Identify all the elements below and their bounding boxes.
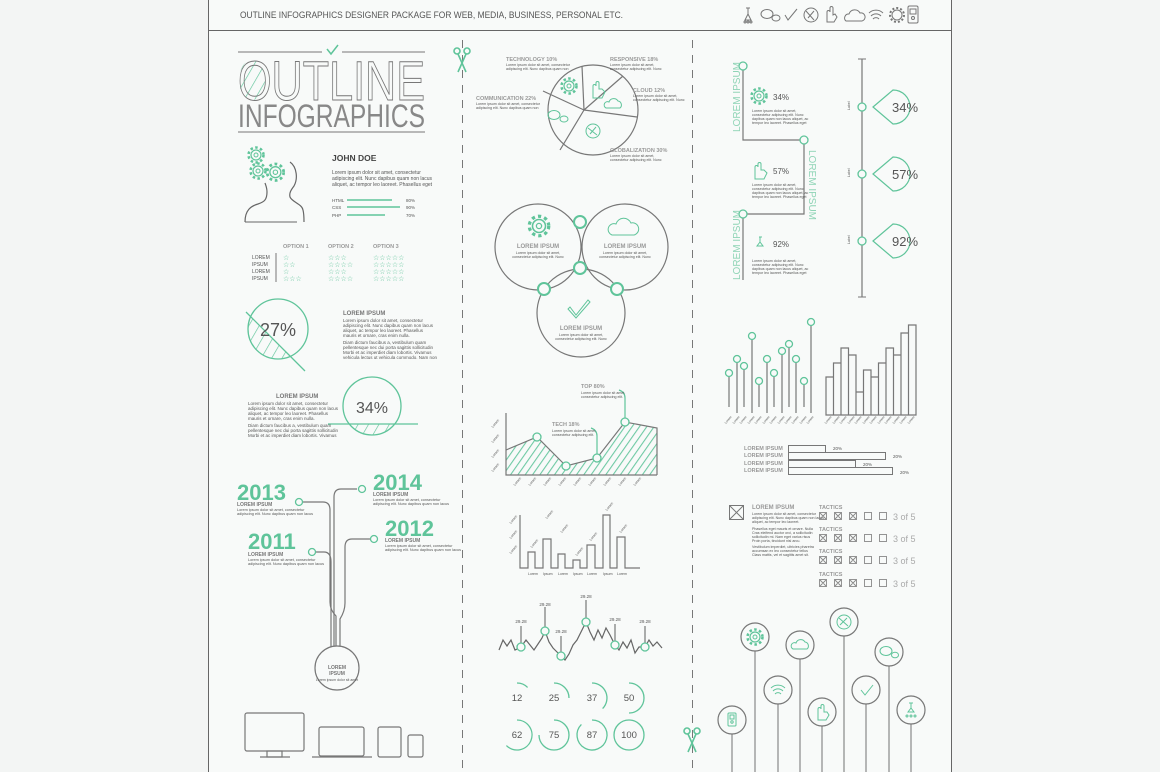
timeline tree: LOREM (328, 665, 346, 671)
venn diagram: LOREM IPSUM (517, 244, 559, 250)
lollipop chart: Lorem (806, 415, 815, 425)
text: 100 (621, 730, 637, 741)
pie chart: COMMUNICATION 22% (476, 96, 536, 102)
tactics checklist: 3 of 5 (893, 534, 916, 544)
drop scale: 34% (892, 100, 918, 115)
ratings table: ☆☆☆☆☆ (373, 261, 404, 269)
tactics checklist: TACTICS (819, 505, 843, 511)
area chart: Lorem (603, 476, 612, 487)
ratings table: IPSUM (252, 262, 268, 268)
pie chart: RESPONSIVE 18% (610, 57, 658, 63)
zigzag timeline: dapibus quam non lacus aliquet, ac (752, 191, 809, 195)
ratings table: ☆☆☆☆☆ (373, 268, 404, 276)
zigzag timeline: LOREM IPSUM (732, 62, 743, 132)
tactics checklist: Phasellus eget mauris et ornare. Nulla (752, 527, 813, 531)
area chart: consectetur adipiscing elit. (581, 395, 623, 399)
text block 2: LOREM IPSUM (276, 394, 318, 400)
profile text (332, 153, 433, 218)
profile text: 70% (406, 213, 415, 218)
column chart right: Lorem (854, 415, 863, 425)
dashed dividers (462, 40, 464, 772)
drop scale: Label (847, 168, 851, 177)
horizontal bars: 20% (833, 446, 842, 451)
bar chart: Lorem (509, 544, 518, 555)
drop scale: Label (847, 101, 851, 110)
ratings table: ☆☆☆☆ (328, 275, 353, 283)
ratings table: ☆☆☆☆☆ (373, 254, 404, 262)
text block 1: LOREM IPSUM (343, 311, 385, 317)
timeline tree: 2011 (248, 529, 296, 554)
pie chart: Lorem ipsum dolor sit amet, (610, 63, 654, 67)
ratings table: LOREM (252, 255, 270, 261)
lollipop chart: Lorem (769, 415, 778, 425)
tactics checklist: TACTICS (819, 549, 843, 555)
zigzag timeline: tempor leo laoreet. Phasellus eget (752, 121, 807, 125)
timeline tree: Lorem ipsum dolor sit amet, consectetur (385, 544, 453, 548)
venn diagram: LOREM IPSUM (604, 244, 646, 250)
area chart: Lorem (491, 433, 500, 444)
ratings table: ☆☆☆ (283, 275, 302, 283)
wave line chart: 29.28 (539, 602, 551, 607)
tactics checklist: adipiscing elit. Nunc dapibus quam non lacus (752, 516, 824, 520)
tactics checklist: Proin porta, tincidunt nisl arcu. (752, 539, 800, 543)
profile text: CSS (332, 205, 341, 210)
pie chart: adipiscing elit. Nunc dapibus quam non (506, 67, 569, 71)
wave line chart: 29.28 (639, 619, 651, 624)
column chart right: Lorem (862, 415, 871, 425)
pie chart (476, 57, 685, 162)
text block 1: Diam dictum faucibus a, vestibulum quam (343, 340, 427, 345)
column chart right: Lorem (839, 415, 848, 425)
text block 1: Lorem ipsum dolor sit amet, consectetur (343, 318, 424, 323)
text block 2: adipiscing elit. Nunc dapibus quam non lacus (248, 406, 339, 411)
area chart: Lorem (491, 418, 500, 429)
zigzag timeline: tempor leo laoreet. Phasellus eget (752, 195, 807, 199)
lollipop chart: Lorem (784, 415, 793, 425)
timeline tree: LOREM IPSUM (248, 552, 283, 558)
icon: scissors bottom (684, 728, 700, 752)
timeline tree (237, 470, 461, 690)
area chart: Lorem (528, 476, 537, 487)
timeline tree: Lorem ipsum dolor sit amet, consectetur (248, 558, 316, 562)
venn diagram: Lorem ipsum dolor sit amet, (603, 251, 647, 255)
profile text: aliquet, ac tempor leo laoreet. Phasellus eget (332, 182, 433, 188)
pie chart: TECHNOLOGY 10% (506, 57, 557, 63)
ratings table: OPTION 3 (373, 244, 399, 250)
column chart right: Lorem (877, 415, 886, 425)
area chart: Lorem ipsum dolor sit amet, (552, 429, 596, 433)
column chart right: Lorem (884, 415, 893, 425)
bar chart: Lorem (619, 523, 628, 534)
area chart: Lorem (491, 462, 500, 473)
horizontal bars (744, 446, 909, 475)
timeline tree: Lorem ipsum dolor sit amet (316, 678, 358, 682)
zigzag timeline: LOREM IPSUM (732, 210, 743, 280)
bar chart: Lorem (617, 572, 627, 576)
column chart right: Lorem (899, 415, 908, 425)
text block 1: pellentesque nec dui porta sagittis sollicitudin (343, 345, 434, 350)
tactics checklist: TACTICS (819, 572, 843, 578)
lollipop chart: Lorem (762, 415, 771, 425)
zigzag timeline: Lorem ipsum dolor sit amet, (752, 109, 796, 113)
pie chart: adipiscing elit. Nunc dapibus quam non (476, 106, 539, 110)
pie chart: consectetur adipiscing elit. Nunc (610, 67, 662, 71)
bar chart: Lorem (589, 531, 598, 542)
bar chart: Lorem (509, 514, 518, 525)
profile text: PHP (332, 213, 341, 218)
horizontal bars: 20% (900, 470, 909, 475)
text block 2: mauris et ornare, cras enim nulla. (248, 416, 315, 421)
lollipop chart: Lorem (747, 415, 756, 425)
column chart right: Lorem (892, 415, 901, 425)
ratings table: ☆ (283, 254, 289, 262)
text block 2: pellentesque nec dui porta sagittis sollicitudin (248, 428, 339, 433)
zigzag timeline: 57% (773, 167, 789, 176)
icon: scissors top (454, 48, 470, 72)
lollipop chart: Lorem (724, 415, 733, 425)
column chart right: Lorem (847, 415, 856, 425)
title (238, 45, 425, 134)
lollipop chart: Lorem (799, 415, 808, 425)
header icons (744, 6, 918, 23)
column chart right: Lorem (832, 415, 841, 425)
ratings table: OPTION 2 (328, 244, 354, 250)
tactics checklist: LOREM IPSUM (752, 505, 794, 511)
profile: head with gears (245, 148, 304, 222)
horizontal bars: 20% (863, 462, 872, 467)
bar chart: Lorem (575, 546, 584, 557)
zigzag timeline: Lorem ipsum dolor sit amet, (752, 259, 796, 263)
area chart: TOP 80% (581, 384, 605, 390)
tactics checklist: TACTICS (819, 527, 843, 533)
ratings table (252, 244, 404, 283)
bar chart: Lorem (530, 538, 539, 549)
ratings table: LOREM (252, 269, 270, 275)
text: 50 (624, 693, 634, 704)
wave line chart: 29.28 (555, 629, 567, 634)
venn diagram: LOREM IPSUM (560, 326, 602, 332)
wave line chart: 29.28 (609, 617, 621, 622)
venn diagram: consectetur adipiscing elit. Nunc (555, 337, 607, 341)
timeline tree: adipiscing elit. Nunc dapibus quam non lacus (373, 502, 449, 506)
text block 1: aliquet, ac tempor leo laoreet. Phasellus (343, 328, 424, 333)
timeline tree: 2014 (373, 470, 423, 495)
zigzag timeline: consectetur adipiscing elit. Nunc (752, 263, 804, 267)
page (208, 0, 952, 772)
drop scale: 92% (892, 234, 918, 249)
devices (245, 713, 423, 757)
area chart: consectetur adipiscing elit. (552, 433, 594, 437)
zigzag timeline: tempor leo laoreet. Phasellus eget (752, 271, 807, 275)
column chart right (824, 325, 916, 425)
ratings table: ☆☆☆ (328, 268, 347, 276)
zigzag timeline: dapibus quam non lacus aliquet, ac (752, 117, 809, 121)
area chart: Lorem (558, 476, 567, 487)
title: INFOGRAPHICS (238, 98, 425, 134)
tactics checklist: accumsan ex leo consectetur tellus (752, 549, 808, 553)
timeline tree: LOREM IPSUM (237, 502, 272, 508)
text block 1: adipiscing elit. Nunc dapibus quam non lacus (343, 323, 434, 328)
pie chart: Lorem ipsum dolor sit amet, consectetur (476, 102, 541, 106)
area chart: Lorem (513, 476, 522, 487)
text block 2: Diam dictum faucibus a, vestibulum quam (248, 423, 332, 428)
wave line chart: 29.28 (580, 594, 592, 599)
area chart: Lorem (573, 476, 582, 487)
zigzag timeline: 34% (773, 93, 789, 102)
wave line chart (499, 594, 662, 660)
profile text: 80% (406, 198, 415, 203)
drop scale: Label (847, 235, 851, 244)
profile text: HTML (332, 198, 345, 203)
icon lollipops (718, 608, 925, 772)
ratings table: IPSUM (252, 276, 268, 282)
timeline tree: Lorem ipsum dolor sit amet, consectetur (373, 498, 441, 502)
chart: 27% circle: 27% (260, 320, 296, 340)
progress circles (506, 683, 644, 750)
pie chart: consectetur adipiscing elit. Nunc (610, 158, 662, 162)
text block 2: Lorem ipsum dolor sit amet, consectetur (248, 401, 329, 406)
timeline tree: adipiscing elit. Nunc dapibus quam non lacus (385, 548, 461, 552)
text block 1: Morbi et ac imperdiet diam lobortis. Vivamus (343, 350, 432, 355)
horizontal bars: LOREM IPSUM (744, 468, 783, 474)
text: 12 (512, 693, 522, 704)
zigzag timeline: LOREM IPSUM (806, 150, 817, 220)
venn diagram: consectetur adipiscing elit. Nunc (599, 255, 651, 259)
bar chart: Lorem (587, 572, 597, 576)
zigzag timeline: Lorem ipsum dolor sit amet, (752, 183, 796, 187)
tactics checklist: 3 of 5 (893, 556, 916, 566)
timeline tree: adipiscing elit. Nunc dapibus quam non lacus (237, 512, 313, 516)
text: 62 (512, 730, 522, 741)
tactics checklist: Lorem ipsum dolor sit amet, consectetur (752, 512, 817, 516)
bar chart: Lorem (528, 572, 538, 576)
lollipop chart: Lorem (754, 415, 763, 425)
pie chart: Lorem ipsum dolor sit amet, (610, 154, 654, 158)
text block 1 (343, 311, 438, 360)
text block 1: vehicula lectus ut vehicula commodo. Nam non (343, 355, 438, 360)
column chart right: Lorem (907, 415, 916, 425)
tactics checklist: Class mattis, vel et sagittis amet sit. (752, 553, 809, 557)
bar chart: Ipsum (543, 572, 553, 576)
bar chart: Lorem (560, 523, 569, 534)
bar chart (509, 501, 640, 576)
tactics checklist: 3 of 5 (893, 512, 916, 522)
area chart: TECH 18% (552, 422, 580, 428)
timeline tree: 2013 (237, 480, 286, 505)
profile text: adipiscing elit. Nunc dapibus quam non lacus (332, 176, 433, 182)
text block 1: mauris et ornare, cras enim nulla. (343, 333, 410, 338)
column chart right: Lorem (869, 415, 878, 425)
tactics checklist: aliquet, ac tempor leo laoreet. (752, 520, 799, 524)
area chart: Lorem ipsum dolor sit amet, (581, 391, 625, 395)
zigzag timeline: consectetur adipiscing elit. Nunc (752, 113, 804, 117)
pie chart: Lorem ipsum dolor sit amet, consectetur (506, 63, 571, 67)
drop scale (847, 59, 918, 297)
chart: 34% circle: 34% (356, 400, 388, 417)
zigzag timeline: dapibus quam non lacus aliquet, ac (752, 267, 809, 271)
pie chart: GLOBALIZATION 30% (610, 148, 667, 154)
header text: OUTLINE INFOGRAPHICS DESIGNER PACKAGE FOR WEB, MEDIA, BUSINESS, PERSONAL ETC. (240, 10, 623, 20)
horizontal bars: LOREM IPSUM (744, 461, 783, 467)
timeline tree: adipiscing elit. Nunc dapibus quam non lacus (248, 562, 324, 566)
ratings table: ☆☆☆☆ (328, 261, 353, 269)
timeline tree: LOREM IPSUM (373, 492, 408, 498)
bar chart: Ipsum (573, 572, 583, 576)
ratings table: ☆ (283, 268, 289, 276)
text block 2: Morbi et ac imperdiet diam lobortis. Vivamus (248, 433, 337, 438)
tactics checklist: sollicitudin mi. Nam eget varius risus (752, 535, 810, 539)
timeline tree: 2012 (385, 516, 434, 541)
bar chart: Lorem (605, 501, 614, 512)
timeline tree: LOREM IPSUM (385, 538, 420, 544)
chart: 27% circle (246, 298, 309, 372)
zigzag timeline (732, 62, 817, 280)
lollipop chart: Lorem (777, 415, 786, 425)
title: OUTLINE (238, 49, 425, 112)
ratings table: ☆☆ (283, 261, 296, 269)
text: 25 (549, 693, 559, 704)
lollipop chart: Lorem (732, 415, 741, 425)
area chart: Lorem (588, 476, 597, 487)
text: 87 (587, 730, 597, 741)
tactics checklist: Vestibulum imperdiet, ultricies pharetra (752, 545, 814, 549)
tactics checklist: Cras eleifend auctor orci, a sollicitudin (752, 531, 813, 535)
drop scale: 57% (892, 167, 918, 182)
horizontal bars: LOREM IPSUM (744, 453, 783, 459)
area chart: Lorem (491, 448, 500, 459)
chart: 34% circle (328, 377, 418, 440)
zigzag timeline: consectetur adipiscing elit. Nunc (752, 187, 804, 191)
bar chart: Lorem (509, 529, 518, 540)
timeline tree: Lorem ipsum dolor sit amet, consectetur (237, 508, 305, 512)
venn diagram: Lorem ipsum dolor sit amet, (559, 333, 603, 337)
area chart: Lorem (618, 476, 627, 487)
text block 2: aliquet, ac tempor leo laoreet. Phasellus (248, 411, 329, 416)
area chart (491, 384, 657, 487)
pie chart: CLOUD 12% (633, 88, 665, 94)
ratings table: OPTION 1 (283, 244, 309, 250)
area chart: Lorem (543, 476, 552, 487)
ratings table: ☆☆☆☆☆ (373, 275, 404, 283)
zigzag timeline: 92% (773, 240, 789, 249)
bar chart: Lorem (545, 509, 554, 520)
bar chart: Ipsum (603, 572, 613, 576)
lollipop chart: Lorem (739, 415, 748, 425)
pie chart: Lorem ipsum dolor sit amet, (633, 94, 677, 98)
pie chart: consectetur adipiscing elit. Nunc (633, 98, 685, 102)
tactics checklist (730, 505, 916, 589)
lollipop chart: Lorem (791, 415, 800, 425)
wave line chart: 29.28 (515, 619, 527, 624)
timeline tree: IPSUM (329, 671, 345, 677)
venn diagram (495, 204, 668, 357)
text: 37 (587, 693, 597, 704)
venn diagram: Lorem ipsum dolor sit amet, (516, 251, 560, 255)
tactics checklist: 3 of 5 (893, 579, 916, 589)
text block 2 (248, 394, 339, 438)
profile text: Lorem ipsum dolor sit amet, consectetur (332, 170, 421, 176)
venn diagram: consectetur adipiscing elit. Nunc (512, 255, 564, 259)
lollipop chart (724, 318, 815, 425)
bar chart: Lorem (558, 572, 568, 576)
profile text: JOHN DOE (332, 153, 377, 163)
horizontal bars: 20% (893, 454, 902, 459)
area chart: Lorem (633, 476, 642, 487)
horizontal bars: LOREM IPSUM (744, 446, 783, 452)
text: 75 (549, 730, 559, 741)
profile text: 90% (406, 205, 415, 210)
ratings table: ☆☆☆ (328, 254, 347, 262)
column chart right: Lorem (824, 415, 833, 425)
